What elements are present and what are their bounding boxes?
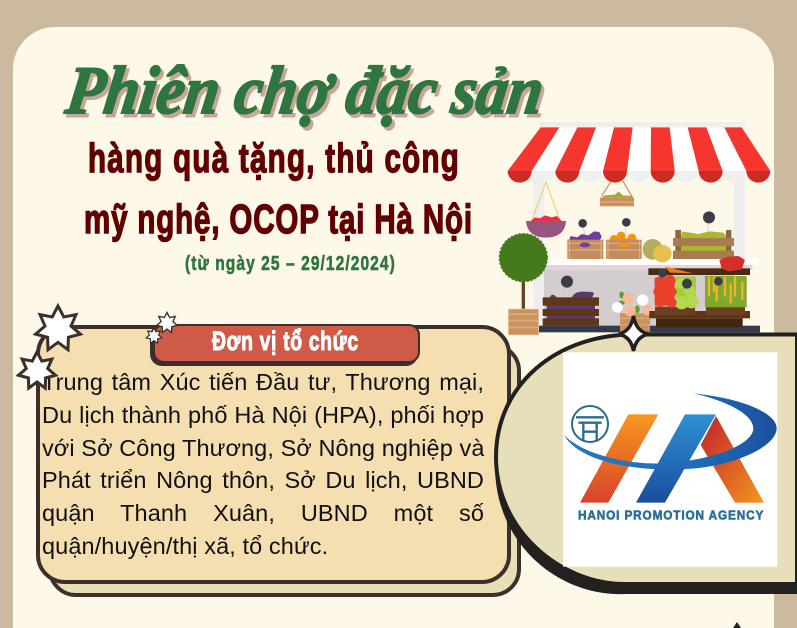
stall posts [533, 175, 544, 322]
logo: gate emblem [572, 406, 608, 442]
organizer heading pill [150, 324, 419, 366]
title: script line: Phiên chợ đặc sản [64, 56, 552, 131]
logo panel [495, 316, 797, 594]
counter [544, 259, 758, 265]
heading: organizer: Đơn vị tổ chức [212, 326, 358, 356]
melons [643, 239, 672, 262]
medium star [18, 352, 56, 388]
small star two [146, 328, 162, 343]
awning [508, 122, 770, 183]
vegetable display table [648, 256, 750, 327]
hanging crate [600, 181, 634, 206]
title: line three: mỹ nghệ, OCOP tại Hà Nội [84, 196, 472, 242]
tree in pot [499, 234, 547, 335]
logo: blue bar [636, 414, 716, 503]
organizer panel [38, 327, 509, 582]
stall back wall [544, 265, 734, 327]
flower pot [612, 292, 653, 332]
notch star [619, 316, 648, 351]
large star [36, 306, 80, 350]
organizer description text: với Sở Công Thương, Sở Nông nghiệp và [42, 435, 484, 461]
logo: swoosh [564, 393, 777, 469]
crate of eggplants [543, 276, 599, 326]
logo: red right leg [701, 416, 764, 503]
logo: agency name: HANOI PROMOTION AGENCY [578, 508, 763, 522]
crate of oranges [606, 218, 642, 259]
organizer description text: Phát triển Nông thôn, Sở Du lịch, UBND [42, 467, 484, 493]
crate of grapes [567, 219, 603, 259]
market stall illustration [499, 122, 770, 335]
lower decoration tip [733, 622, 741, 628]
organizer panel shadow layer [50, 345, 519, 595]
title: script line: Phiên chợ đặc sản [61, 52, 549, 128]
Hanoi Promotion Agency logo [563, 352, 777, 567]
organizer description text: quận/huyện/thị xã, tổ chức. [42, 533, 328, 559]
organizer description text [42, 369, 484, 559]
logo: orange bar [580, 414, 658, 503]
small star one [157, 312, 177, 332]
organizer description text: quận Thanh Xuân, UBND một số [42, 500, 484, 526]
hanging fruit basket [526, 182, 566, 238]
organizer description text: Du lịch thành phố Hà Nội (HPA), phối hợp [42, 402, 484, 428]
crate of green fruit [673, 211, 734, 259]
title: line two: hàng quà tặng, thủ công [88, 135, 459, 181]
date line: (từ ngày 25 – 29/12/2024) [185, 252, 395, 274]
organizer description text: Trung tâm Xúc tiến Đầu tư, Thương mại, [42, 369, 484, 395]
stall base [538, 326, 760, 332]
